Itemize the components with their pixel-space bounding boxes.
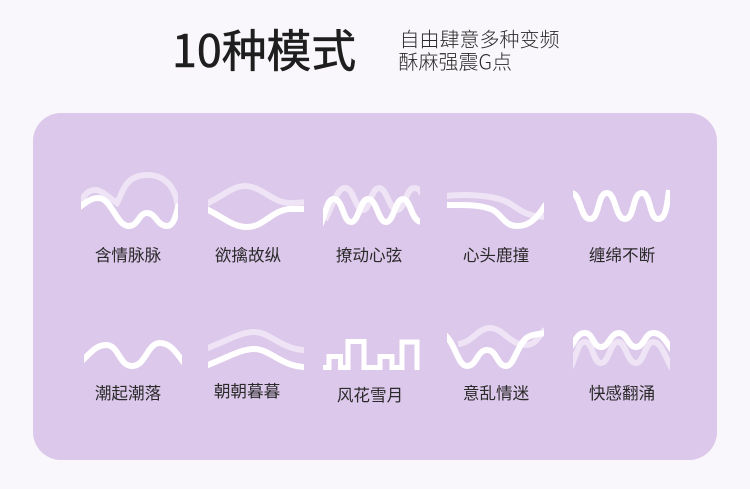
subtitle: 酥麻强震G点 [398,46,512,75]
mode 10: 快感翻涌: 快感翻涌 [589,380,655,404]
mode 4: 心头鹿撞 [445,195,546,266]
mode 7: 朝朝暮暮 [205,332,306,402]
mode 3: 撩动心弦: 撩动心弦 [336,242,402,266]
mode 8: 风花雪月: 风花雪月 [337,382,403,406]
mode 6: 潮起潮落: 潮起潮落 [95,380,162,404]
mode 1: 含情脉脉: 含情脉脉 [95,242,162,266]
mode 4: 心头鹿撞: 心头鹿撞 [463,242,529,266]
subtitle: 自由肆意多种变频 [400,24,560,52]
mode 9: 意乱情迷: 意乱情迷 [463,380,530,404]
mode 2: 欲擒故纵: 欲擒故纵 [215,242,281,266]
mode 6: 潮起潮落 [81,343,184,404]
subtitle [398,24,560,75]
mode 7: 朝朝暮暮: 朝朝暮暮 [214,378,281,402]
mode 5: 缠绵不断 [571,190,669,266]
mode 2: 欲擒故纵 [204,186,306,266]
title: 10种模式 [172,15,356,80]
mode 5: 缠绵不断: 缠绵不断 [589,242,655,266]
mode 9: 意乱情迷 [445,328,546,404]
panel: modes [33,113,717,460]
mode 10: 快感翻涌 [570,333,672,404]
mode 8: 风花雪月 [323,342,417,406]
mode 3: 撩动心弦 [320,188,422,266]
mode 1: 含情脉脉 [76,175,179,266]
